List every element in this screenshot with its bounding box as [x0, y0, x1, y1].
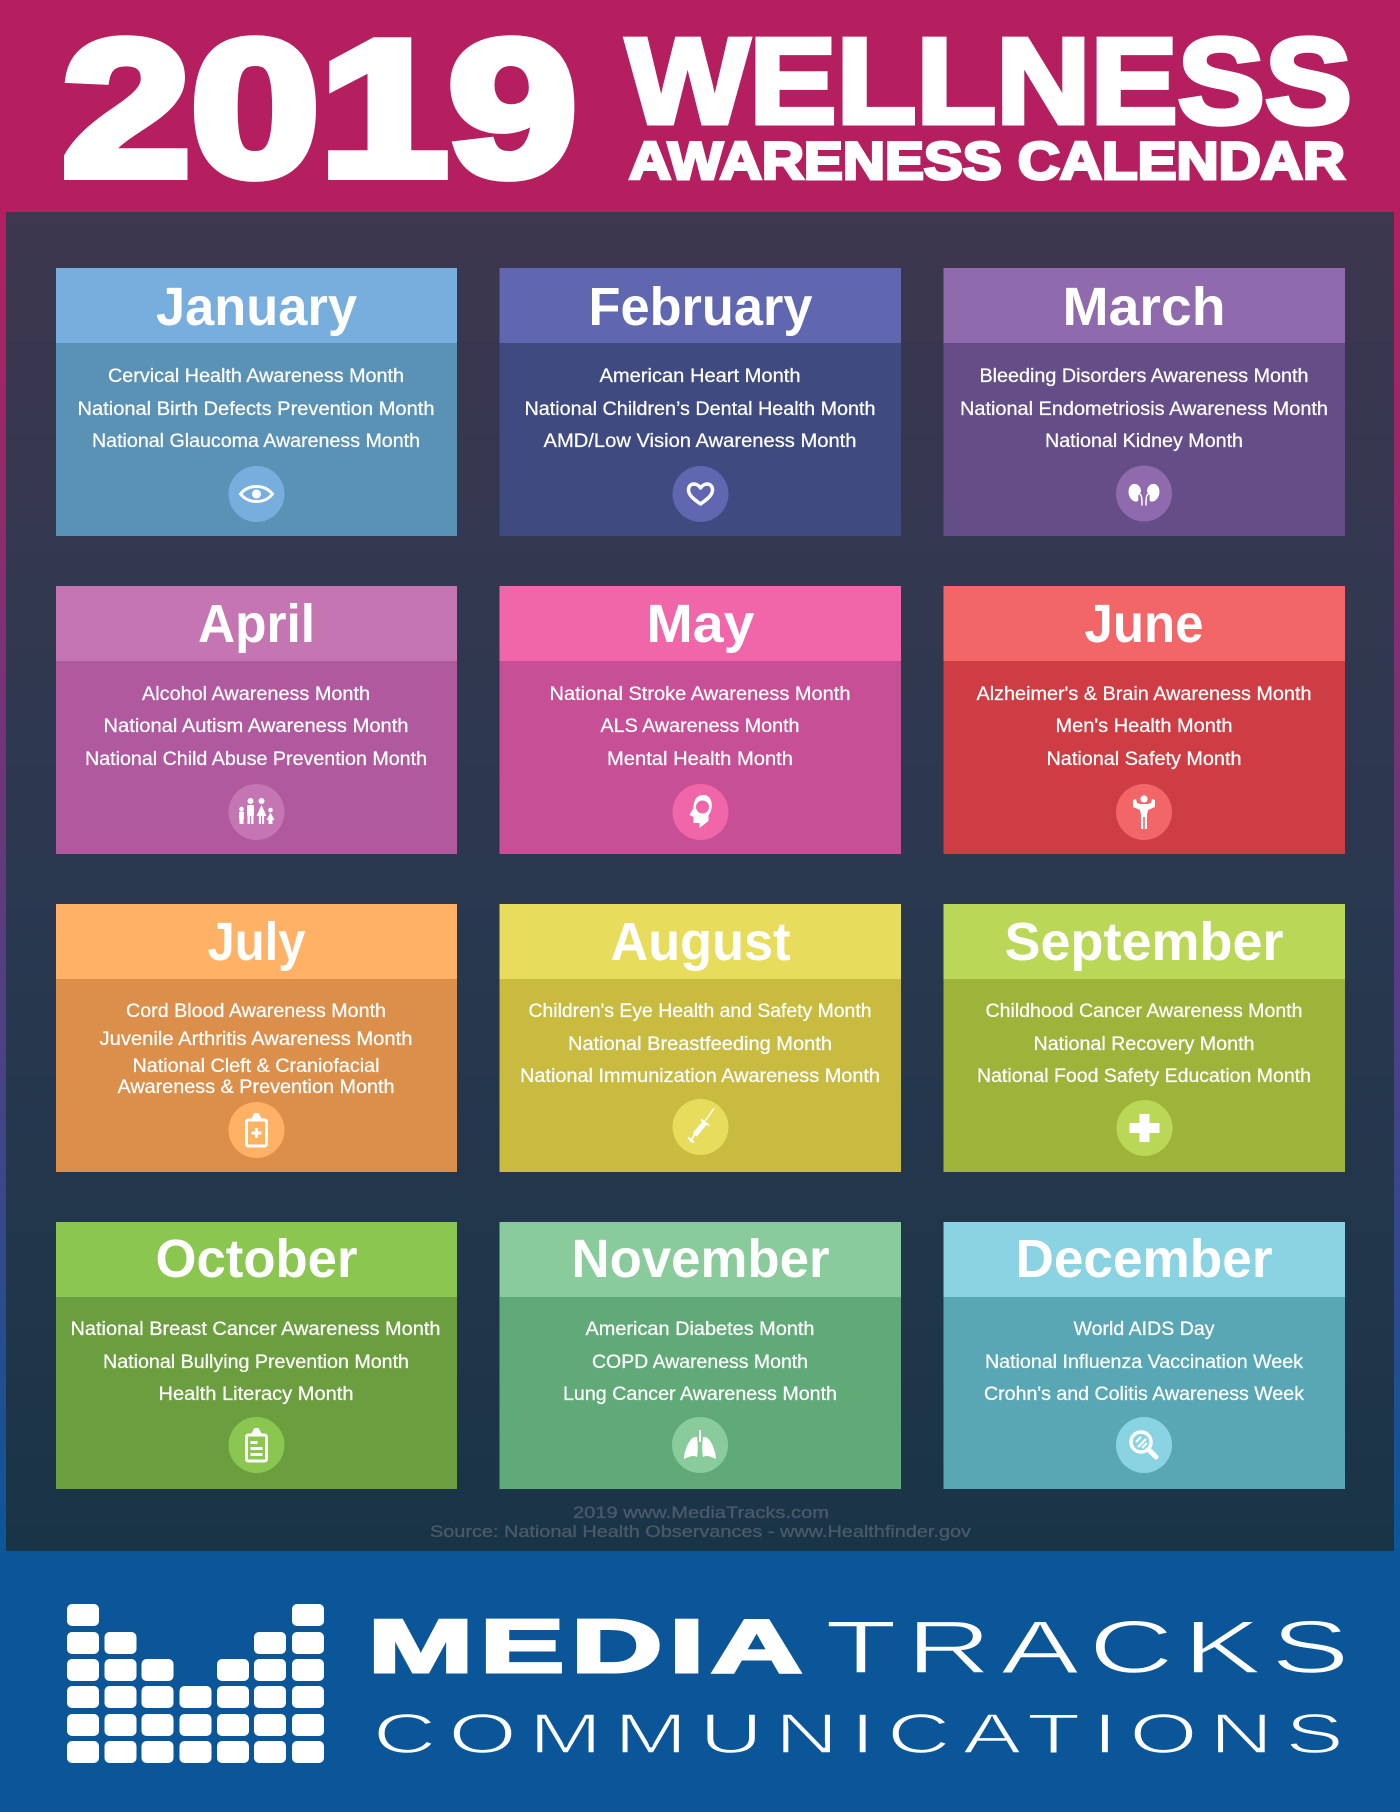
observances: December	[984, 1319, 1305, 1405]
observances: December: National Influenza Vaccination Week	[985, 1352, 1304, 1373]
panel: October	[56, 1222, 457, 1489]
observances: March: Bleeding Disorders Awareness Month	[980, 366, 1308, 387]
panel: July	[56, 904, 457, 1172]
observances: August: National Immunization Awareness Month	[520, 1066, 880, 1087]
observances: March: National Kidney Month	[1045, 431, 1243, 452]
icon: magnifier with germ	[1116, 1417, 1172, 1473]
footer band	[0, 1551, 1400, 1812]
observances: September: National Food Safety Education Month	[977, 1066, 1311, 1087]
subtitle: AWARENESS CALENDAR: AWARENESS CALENDAR	[629, 132, 1345, 191]
month heading: January: January	[156, 277, 357, 337]
observances: October: National Bullying Prevention Month	[103, 1352, 409, 1373]
logo word: COMMUNICATIONS: COMMUNICATIONS	[373, 1702, 1356, 1766]
month heading: September: September	[1004, 912, 1284, 972]
observances: August	[520, 1001, 880, 1087]
panel: June	[944, 586, 1345, 854]
month heading: August: August	[610, 912, 791, 972]
panel: January	[56, 268, 457, 536]
panel: September	[944, 904, 1345, 1172]
icon: strong man	[1116, 784, 1172, 840]
observances: August: Children's Eye Health and Safety Month	[528, 1001, 872, 1022]
observances: November: Lung Cancer Awareness Month	[563, 1384, 837, 1405]
observances: November: COPD Awareness Month	[592, 1352, 808, 1373]
observances: July: Juvenile Arthritis Awareness Month	[100, 1029, 412, 1050]
observances: November: American Diabetes Month	[586, 1319, 814, 1340]
observances: July: Cord Blood Awareness Month	[126, 1001, 386, 1022]
month heading: October: October	[156, 1229, 358, 1289]
observances: March	[960, 366, 1328, 452]
month heading: December: December	[1016, 1229, 1272, 1289]
observances: September	[977, 1001, 1311, 1087]
title: WELLNESS: WELLNESS	[626, 13, 1352, 149]
observances: August: National Breastfeeding Month	[568, 1034, 832, 1055]
observances: July: Awareness & Prevention Month	[118, 1077, 394, 1098]
observances: January	[78, 366, 434, 452]
observances: January: National Glaucoma Awareness Month	[92, 431, 420, 452]
month heading: November: November	[572, 1229, 830, 1289]
month heading: June: June	[1084, 594, 1204, 654]
observances: June: Men's Health Month	[1056, 716, 1232, 737]
observances: February: AMD/Low Vision Awareness Month	[544, 431, 856, 452]
observances: October: National Breast Cancer Awareness Month	[70, 1319, 441, 1340]
logo mark: equalizer blocks	[67, 1604, 324, 1763]
observances: February: American Heart Month	[600, 366, 800, 387]
panel: August	[500, 904, 901, 1172]
observances: May: ALS Awareness Month	[600, 716, 800, 737]
observances: September: National Recovery Month	[1034, 1034, 1254, 1055]
month heading: April: April	[198, 594, 315, 654]
panel: March	[944, 268, 1345, 536]
panel: May	[500, 586, 901, 854]
calendar panel background	[6, 212, 1394, 1551]
observances: December: Crohn's and Colitis Awareness Week	[984, 1384, 1305, 1405]
panel: November	[500, 1222, 901, 1489]
header banner	[0, 0, 1400, 216]
icon: medical cross	[1116, 1100, 1172, 1156]
icon: kidneys	[1116, 466, 1172, 522]
icon: eye	[228, 466, 284, 522]
observances: February	[524, 366, 876, 452]
observances: November	[563, 1319, 837, 1405]
source note: Source: National Health Observances - www.Healthfinder.gov	[430, 1522, 972, 1541]
observances: January: Cervical Health Awareness Month	[108, 366, 404, 387]
logo word: TRACKS: TRACKS	[825, 1605, 1359, 1689]
title: 2019: 2019	[62, 0, 577, 216]
observances: October: Health Literacy Month	[158, 1384, 354, 1405]
logo word: MEDIA: MEDIA	[368, 1604, 809, 1688]
observances: July	[100, 1001, 412, 1098]
month heading: May: May	[646, 594, 754, 654]
source note	[430, 1503, 972, 1541]
observances: April	[85, 684, 427, 770]
month heading: July: July	[208, 912, 306, 972]
icon: family	[228, 784, 284, 840]
source note: 2019 www.MediaTracks.com	[573, 1503, 829, 1522]
icon: syringe	[672, 1099, 728, 1155]
observances: July: National Cleft & Craniofacial	[132, 1056, 380, 1077]
observances: January: National Birth Defects Prevention Month	[78, 399, 434, 420]
observances: December: World AIDS Day	[1074, 1319, 1215, 1340]
icon: head with brain	[672, 784, 728, 840]
icon: clipboard with plus	[228, 1102, 284, 1158]
panel: April	[56, 586, 457, 854]
observances: September: Childhood Cancer Awareness Month	[986, 1001, 1302, 1022]
observances: February: National Children’s Dental Health Month	[524, 399, 876, 420]
observances: May: Mental Health Month	[607, 749, 793, 770]
month heading: March: March	[1062, 277, 1226, 337]
icon: lungs	[672, 1417, 728, 1473]
observances: May: National Stroke Awareness Month	[550, 684, 850, 705]
observances: April: National Autism Awareness Month	[104, 716, 408, 737]
icon: heart	[672, 466, 728, 522]
observances: April: Alcohol Awareness Month	[142, 684, 370, 705]
month heading: February: February	[588, 277, 812, 337]
observances: June	[976, 684, 1312, 770]
panel: December	[944, 1222, 1345, 1489]
observances: June: Alzheimer's & Brain Awareness Month	[976, 684, 1312, 705]
observances: October	[70, 1319, 441, 1405]
icon: clipboard list	[228, 1417, 284, 1473]
observances: June: National Safety Month	[1046, 749, 1242, 770]
observances: May	[550, 684, 850, 770]
panel: February	[500, 268, 901, 536]
observances: March: National Endometriosis Awareness Month	[960, 399, 1328, 420]
observances: April: National Child Abuse Prevention Month	[85, 749, 427, 770]
